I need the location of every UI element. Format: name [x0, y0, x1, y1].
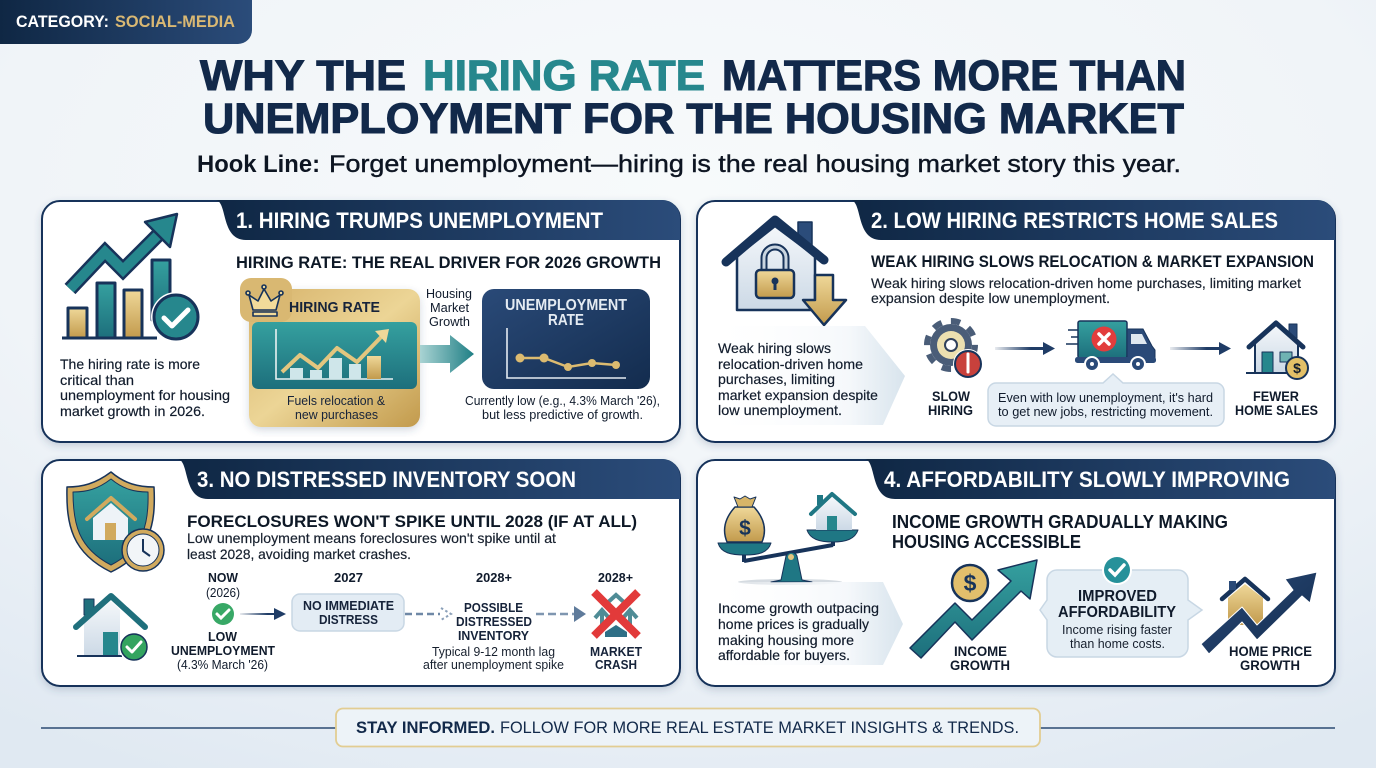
icon: shield with house and clock	[67, 472, 164, 572]
panel 1 header	[215, 200, 680, 240]
subheading and description	[871, 252, 1314, 306]
label: slow hiring: SLOW	[932, 389, 970, 404]
label: income growth: GROWTH	[950, 658, 1010, 673]
subheading: HOUSING ACCESSIBLE	[892, 532, 1081, 552]
chevron with summary text: making housing more	[718, 632, 854, 648]
callout: improved affordability: AFFORDABILITY	[1058, 604, 1176, 621]
subheading and description: Low unemployment means foreclosures won't spike until at	[187, 530, 556, 546]
panel 4 header	[864, 459, 1335, 499]
subheading	[892, 512, 1228, 552]
label: fewer home sales	[1235, 389, 1318, 418]
title: MATTERS MORE THAN	[722, 52, 1186, 100]
unemployment rate card: UNEMPLOYMENT	[505, 297, 627, 314]
title: HIRING RATE	[423, 52, 705, 100]
panel 3: no distressed inventory soon	[42, 459, 680, 686]
arrow: hiring to unemployment	[420, 335, 474, 373]
label: home price growth: GROWTH	[1240, 658, 1300, 673]
chevron with summary text: low unemployment.	[718, 402, 842, 418]
text: unemployment caption: but less predictive of growth.	[482, 407, 643, 422]
text: unemployment caption	[465, 393, 660, 422]
timeline: now 2026: UNEMPLOYMENT	[171, 644, 275, 658]
timeline: 2028 possible distressed inventory: 2028+	[476, 571, 512, 585]
arrow: dashed to possible distressed inventory	[405, 608, 451, 620]
title: WHY THE	[200, 52, 406, 100]
subheading and description: expansion despite low unemployment.	[871, 290, 1110, 306]
icon: balance scale with money bag and house: $	[739, 517, 751, 540]
label: housing market growth: Market	[430, 301, 470, 315]
subheading: HIRING RATE: THE REAL DRIVER FOR 2026 GROWTH	[236, 253, 661, 272]
timeline: 2027 no immediate distress	[292, 571, 404, 631]
subheading: INCOME GROWTH GRADUALLY MAKING	[892, 512, 1228, 532]
title	[200, 52, 1186, 143]
chevron with summary text: market expansion despite	[718, 387, 878, 403]
mini chart: flat unemployment	[507, 328, 626, 378]
subheading and description: FORECLOSURES WON'T SPIKE UNTIL 2028 (IF AT ALL)	[187, 512, 637, 531]
chevron with summary text: Income growth outpacing	[718, 600, 879, 616]
category badge	[0, 0, 252, 44]
timeline: 2028 market crash crossed out: CRASH	[595, 657, 637, 672]
timeline: now 2026	[171, 571, 275, 672]
label: home price growth: HOME PRICE	[1229, 644, 1312, 659]
timeline: 2028 market crash crossed out: 2028+	[598, 571, 633, 585]
timeline: 2028 possible distressed inventory	[423, 571, 564, 672]
subheading and description: Weak hiring slows relocation-driven home purchases, limiting market	[871, 275, 1301, 291]
timeline: now 2026: LOW	[208, 630, 237, 644]
arrow: now to 2027	[240, 608, 286, 620]
timeline: 2028 market crash crossed out: MARKET	[590, 644, 642, 659]
chevron with summary text: purchases, limiting	[718, 371, 835, 387]
panel 2 header: 2. LOW HIRING RESTRICTS HOME SALES	[871, 208, 1278, 233]
icon: rising bar chart with check	[62, 214, 201, 342]
icon: house with coin	[1246, 323, 1308, 379]
icon: locked house with down arrow	[726, 220, 846, 325]
timeline: now 2026: (4.3% March '26)	[177, 658, 268, 672]
mini chart: rising hiring	[276, 329, 393, 379]
icon: income growth arrow with coin: $	[964, 570, 977, 596]
icon: house with coin: $	[1293, 360, 1301, 376]
timeline: now 2026: NOW	[208, 571, 238, 585]
callout: hard to get new jobs	[988, 374, 1224, 426]
panel 2 header	[850, 200, 1335, 240]
chevron with summary text: home prices is gradually	[718, 616, 869, 632]
text: hiring rate summary: unemployment for housing	[60, 387, 230, 403]
timeline: 2028 market crash crossed out	[590, 571, 642, 672]
hiring rate card: Fuels relocation &	[287, 394, 386, 408]
label: home price growth	[1229, 644, 1312, 673]
timeline: 2028 possible distressed inventory: DISTRESSED	[456, 614, 532, 629]
label: income growth	[950, 644, 1010, 673]
label: housing market growth	[426, 287, 472, 329]
footer call to action	[41, 708, 1335, 746]
label: income growth: INCOME	[954, 644, 1007, 659]
icon: stopped moving truck	[1066, 321, 1156, 372]
subheading and description: least 2028, avoiding market crashes.	[187, 546, 411, 562]
chevron with summary text: affordable for buyers.	[718, 647, 850, 663]
chevron with summary text	[705, 582, 903, 665]
panel 2: low hiring restricts home sales	[697, 200, 1335, 442]
panel 3 header	[177, 459, 680, 499]
text: hiring rate summary: The hiring rate is more	[60, 356, 200, 372]
icon: balance scale with money bag and house	[718, 494, 858, 585]
label: fewer home sales: HOME SALES	[1235, 403, 1318, 418]
unemployment rate card: RATE	[548, 312, 584, 329]
subheading and description	[187, 512, 637, 562]
category badge: SOCIAL-MEDIA	[115, 13, 235, 31]
timeline: 2028 possible distressed inventory: Typical 9-12 month lag	[432, 645, 555, 659]
icon: crown	[246, 285, 283, 316]
label: fewer home sales: FEWER	[1253, 389, 1299, 404]
text: hiring rate summary	[60, 356, 230, 419]
hiring rate card	[240, 278, 420, 427]
text: unemployment caption: Currently low (e.g., 4.3% March '26),	[465, 393, 660, 408]
callout: hard to get new jobs: to get new jobs, restricting movement.	[998, 404, 1213, 419]
timeline: 2027 no immediate distress: NO IMMEDIATE	[303, 598, 394, 613]
chevron with summary text	[705, 326, 905, 425]
panel 4 header: 4. AFFORDABILITY SLOWLY IMPROVING	[884, 467, 1290, 492]
hiring rate card: HIRING RATE	[289, 299, 380, 316]
callout: hard to get new jobs: Even with low unemployment, it's hard	[998, 390, 1213, 405]
arrow: to fewer home sales	[1170, 342, 1231, 355]
callout: improved affordability: Income rising faster	[1062, 623, 1172, 637]
timeline: 2028 possible distressed inventory: POSSIBLE	[464, 600, 523, 615]
icon: home price growth arrow with house	[1201, 572, 1317, 654]
hook line: Forget unemployment—hiring is the real housing market story this year.	[329, 151, 1181, 178]
category badge: CATEGORY:	[16, 13, 109, 31]
footer call to action: STAY INFORMED.	[356, 718, 495, 737]
icon: house with check	[76, 596, 149, 662]
chevron with summary text: Weak hiring slows	[718, 340, 831, 356]
timeline: 2028 possible distressed inventory: INVENTORY	[458, 628, 529, 643]
subheading and description: WEAK HIRING SLOWS RELOCATION & MARKET EXPANSION	[871, 252, 1314, 271]
title: UNEMPLOYMENT FOR THE HOUSING MARKET	[203, 95, 1184, 143]
label: slow hiring	[928, 389, 973, 418]
panel 1 header: 1. HIRING TRUMPS UNEMPLOYMENT	[236, 208, 604, 233]
chevron with summary text: relocation-driven home	[718, 356, 863, 372]
arrow: to truck	[995, 342, 1055, 355]
arrow: dashed to market crash	[536, 606, 586, 622]
timeline: now 2026: (2026)	[206, 586, 240, 600]
timeline: 2027 no immediate distress: DISTRESS	[319, 612, 378, 627]
icon: income growth arrow with coin	[910, 560, 1037, 658]
hiring rate card: new purchases	[295, 408, 378, 422]
callout: improved affordability	[1040, 555, 1202, 657]
text: hiring rate summary: market growth in 2026.	[60, 403, 205, 419]
icon: slow hiring gear	[927, 321, 983, 379]
panel 4: affordability slowly improving	[697, 459, 1335, 686]
panel 3 header: 3. NO DISTRESSED INVENTORY SOON	[197, 467, 576, 492]
text: hiring rate summary: critical than	[60, 372, 134, 388]
hook line: Hook Line:	[197, 151, 320, 178]
callout: improved affordability: than home costs.	[1070, 637, 1165, 651]
timeline: 2028 possible distressed inventory: after unemployment spike	[423, 658, 564, 672]
callout: improved affordability: IMPROVED	[1078, 588, 1157, 605]
label: housing market growth: Growth	[429, 315, 470, 329]
unemployment rate card	[482, 289, 650, 389]
panel 1: hiring trumps unemployment	[42, 200, 680, 442]
timeline: 2027 no immediate distress: 2027	[334, 571, 363, 585]
label: slow hiring: HIRING	[928, 403, 973, 418]
label: housing market growth: Housing	[426, 287, 472, 301]
footer call to action: FOLLOW FOR MORE REAL ESTATE MARKET INSIGHTS & TRENDS.	[500, 718, 1019, 737]
